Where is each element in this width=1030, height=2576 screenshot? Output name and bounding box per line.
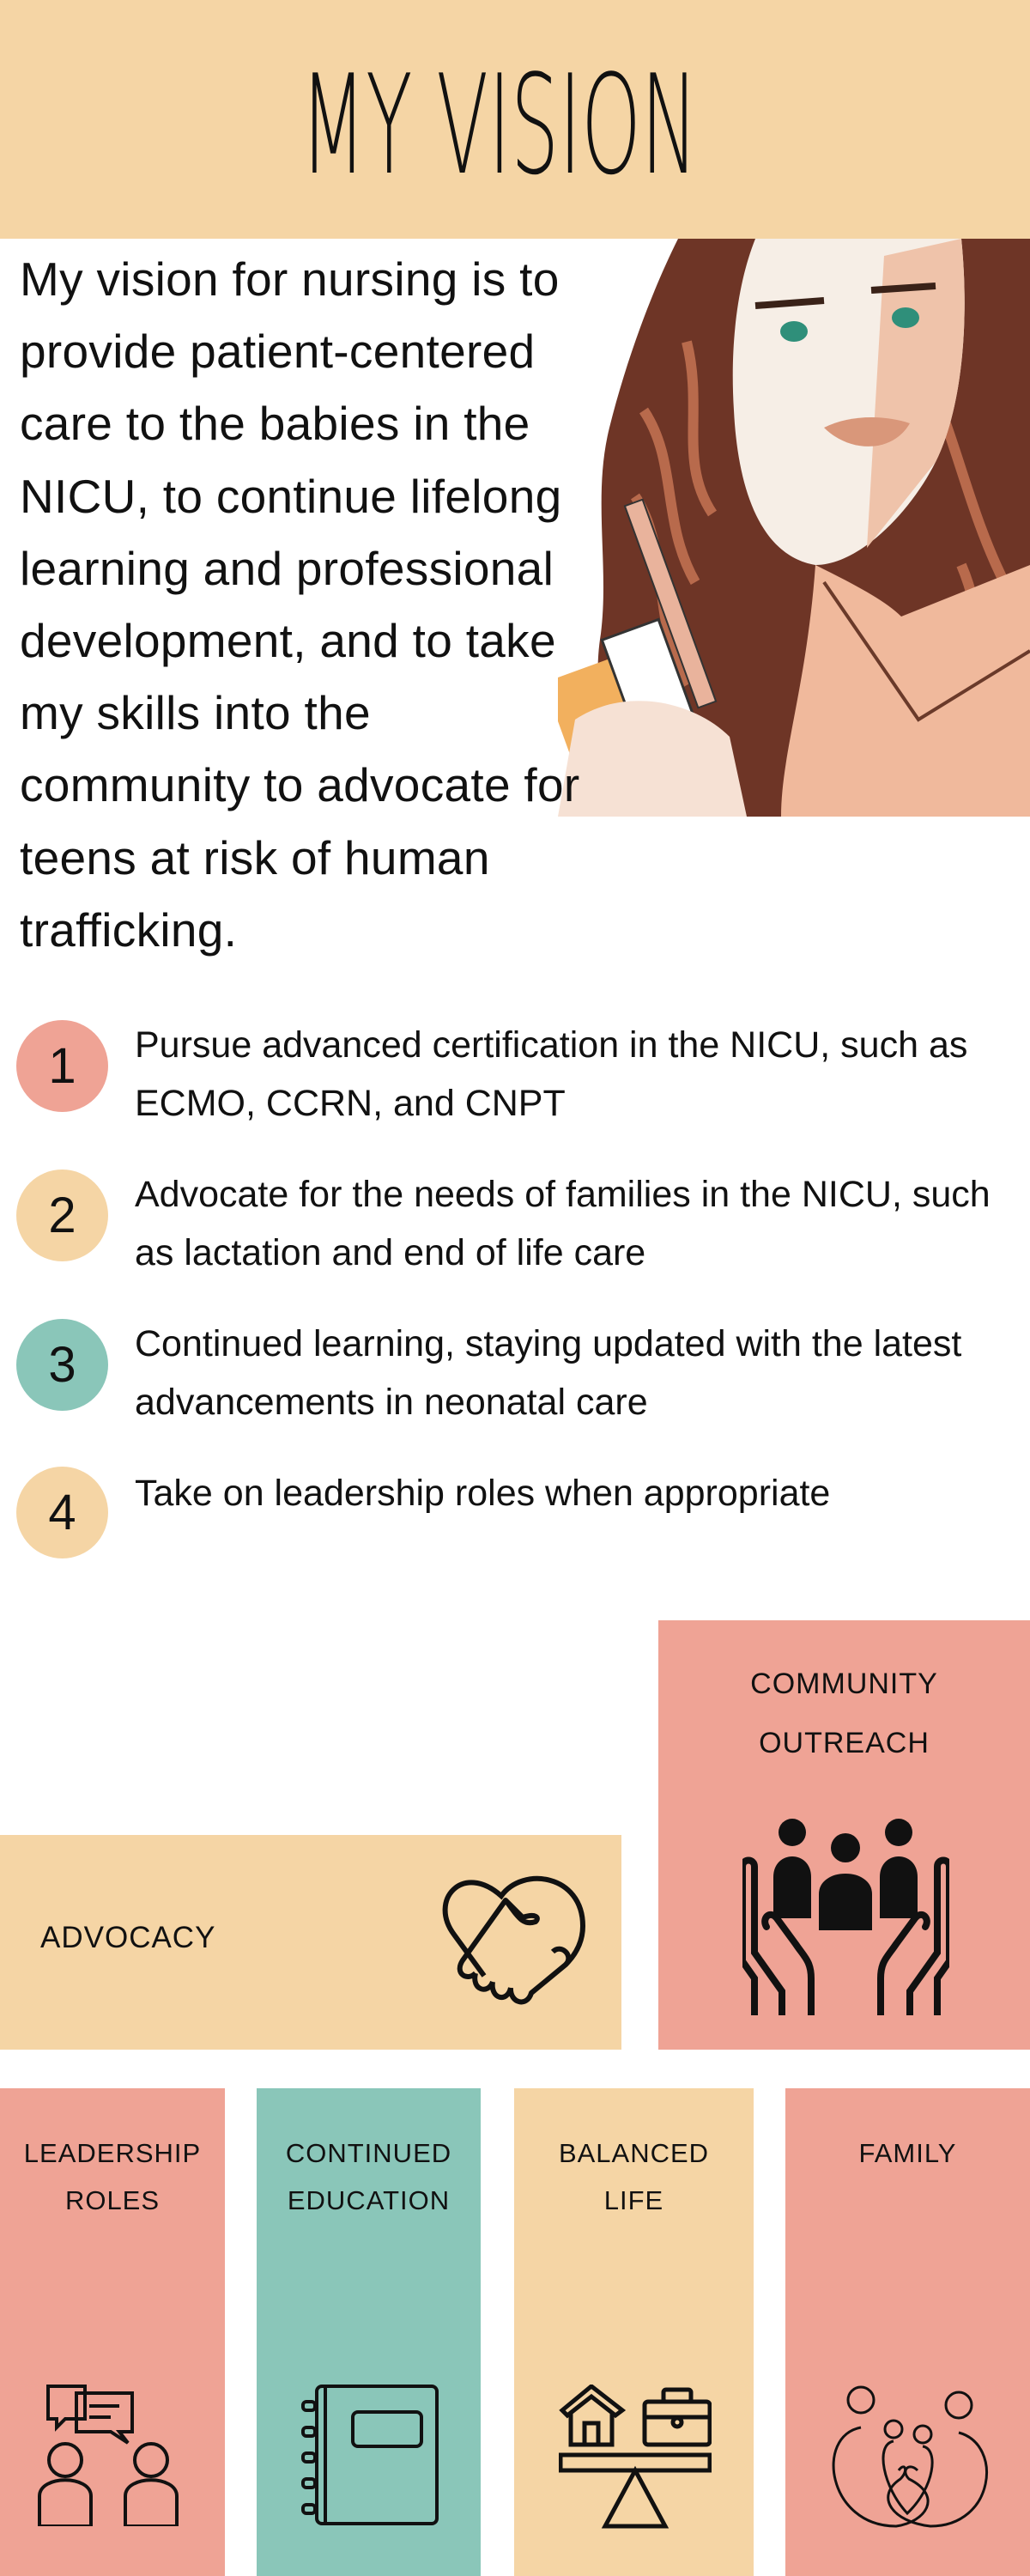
goal 2 text: Advocate for the needs of families in the NICU, such	[135, 1174, 991, 1215]
continued education label: EDUCATION	[288, 2185, 450, 2215]
circle 3: 3	[48, 1337, 76, 1393]
icon: notebook	[301, 2385, 439, 2525]
icon: balance scale with home and briefcase	[559, 2385, 712, 2528]
vision paragraph: My vision for nursing is to	[20, 252, 560, 306]
title: MY VISION	[300, 45, 698, 205]
goal 1	[16, 1020, 967, 1124]
community outreach label: COMMUNITY	[750, 1668, 938, 1700]
balanced life label: BALANCED	[559, 2138, 709, 2168]
community outreach label	[750, 1668, 938, 1759]
vision paragraph: my skills into the	[20, 686, 371, 739]
goal 1 text	[135, 1024, 967, 1124]
goal 1 text: ECMO, CCRN, and CNPT	[135, 1083, 566, 1124]
icon: handshake heart	[443, 1875, 585, 2004]
vision paragraph: NICU, to continue lifelong	[20, 470, 561, 523]
panel: continued education	[257, 2088, 481, 2576]
circle 4: 4	[48, 1485, 76, 1540]
panel: advocacy	[0, 1835, 621, 2050]
panel: community outreach	[658, 1620, 1030, 2050]
advocacy label: ADVOCACY	[40, 1921, 215, 1954]
vision paragraph: provide patient-centered	[20, 325, 535, 378]
circle 2	[16, 1170, 108, 1261]
panel: balanced life	[514, 2088, 754, 2576]
circle 2: 2	[48, 1188, 76, 1243]
goal 2 text	[135, 1174, 991, 1273]
vision paragraph: teens at risk of human	[20, 831, 490, 884]
panel: leadership roles	[0, 2088, 225, 2576]
goal 2 text: as lactation and end of life care	[135, 1232, 645, 1273]
circle 4	[16, 1467, 108, 1558]
balanced life label: LIFE	[604, 2185, 663, 2215]
vision paragraph	[20, 252, 580, 957]
family label: FAMILY	[859, 2138, 956, 2168]
balanced life label	[559, 2138, 709, 2215]
leadership label: ROLES	[65, 2185, 160, 2215]
vision paragraph: care to the babies in the	[20, 397, 530, 450]
vision paragraph: trafficking.	[20, 903, 237, 957]
vision paragraph: community to advocate for	[20, 758, 580, 811]
goal 1 text: Pursue advanced certification in the NICU, such as	[135, 1024, 967, 1066]
goal 3	[16, 1319, 961, 1423]
goal 3 text: Continued learning, staying updated with the latest	[135, 1323, 961, 1364]
continued education label: CONTINUED	[286, 2138, 451, 2168]
panel: family	[785, 2088, 1030, 2576]
circle 1: 1	[48, 1038, 76, 1094]
circle 3	[16, 1319, 108, 1411]
vision paragraph: learning and professional	[20, 542, 554, 595]
leadership label	[24, 2138, 201, 2215]
continued education label	[286, 2138, 451, 2215]
goal 4	[16, 1467, 830, 1558]
icon: family heart	[833, 2385, 989, 2528]
goal 3 text: advancements in neonatal care	[135, 1382, 648, 1423]
goal 4 text: Take on leadership roles when appropriate	[135, 1473, 830, 1514]
goal 3 text	[135, 1323, 961, 1423]
community outreach label: OUTREACH	[759, 1727, 930, 1759]
leadership label: LEADERSHIP	[24, 2138, 201, 2168]
icon: hands holding people	[742, 1819, 949, 2015]
circle 1	[16, 1020, 108, 1112]
header band	[0, 0, 1030, 239]
goal 2	[16, 1170, 991, 1273]
icon: two people talking	[38, 2385, 179, 2526]
portrait illustration	[558, 239, 1030, 817]
vision paragraph: development, and to take	[20, 614, 556, 667]
